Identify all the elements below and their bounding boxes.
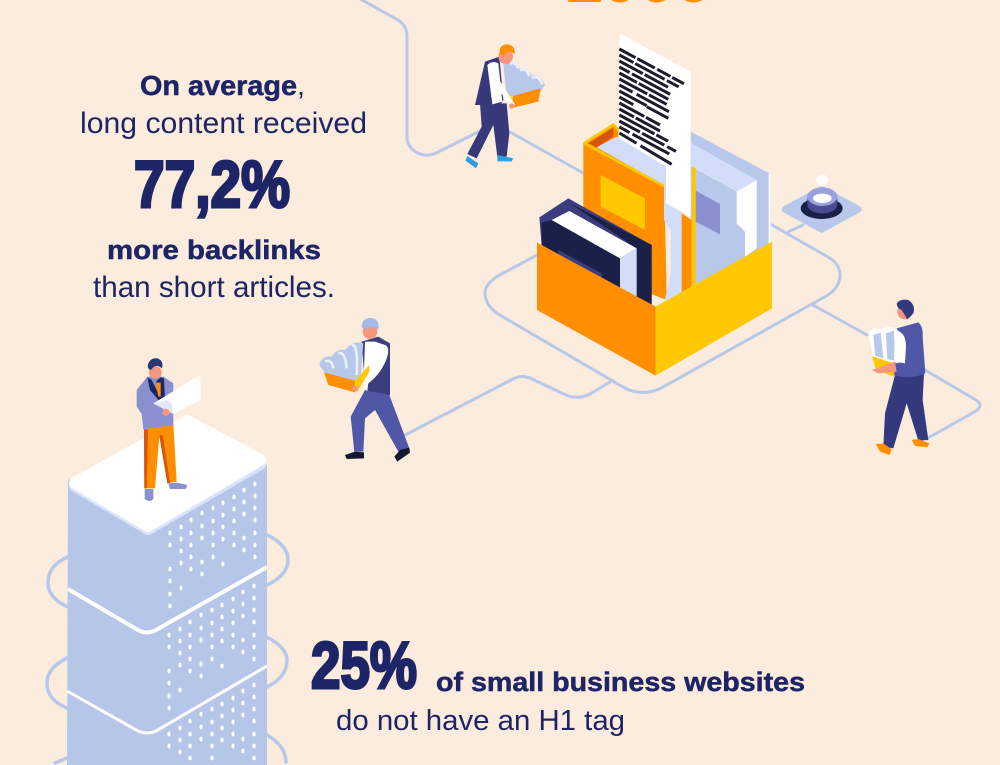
server stack <box>47 421 288 765</box>
vest and shirt <box>362 337 390 397</box>
man <box>465 44 515 168</box>
text: do not have an H1 tag: do not have an H1 tag <box>336 705 625 737</box>
connector lines network <box>362 0 980 438</box>
figure: person carrying box, top <box>465 44 545 168</box>
head <box>363 324 377 339</box>
carried papers <box>319 342 363 385</box>
text: On average: On average, <box>140 70 305 101</box>
text: long content received: long content received <box>80 107 367 140</box>
tablet <box>153 375 201 414</box>
top slab <box>75 421 260 529</box>
orange box <box>324 372 355 392</box>
figure: person with papers, right <box>868 300 929 455</box>
head <box>897 304 913 319</box>
big number: 77,2%: 77,2% <box>134 147 290 221</box>
shoes <box>145 483 187 501</box>
trousers <box>144 423 177 488</box>
white paper sheet with text lines <box>619 33 691 217</box>
figure: man reading on top of stack <box>137 358 201 501</box>
side cable loops <box>47 535 288 763</box>
bell button on pad <box>785 174 858 229</box>
layer seams <box>68 567 267 632</box>
orange folder <box>583 124 696 303</box>
text block: average backlinks statistic <box>80 70 367 304</box>
shoes <box>345 448 410 462</box>
dark book <box>539 198 652 305</box>
vest <box>893 322 925 377</box>
text block: H1 tag statistic <box>311 628 805 737</box>
blue body <box>67 430 267 765</box>
trousers <box>351 390 409 452</box>
jacket <box>137 377 173 429</box>
text: more backlinks: more backlinks <box>107 235 321 265</box>
trousers <box>883 373 928 448</box>
yellow box <box>872 356 895 377</box>
text: of small business websites: of small business websites <box>436 667 805 697</box>
back blue folder <box>691 132 771 287</box>
text: than short articles: than short articles. <box>93 271 335 304</box>
arm hand <box>872 362 897 373</box>
arm hand <box>352 385 358 391</box>
shoes <box>876 439 929 455</box>
figure: person with box, centre left <box>319 318 410 462</box>
illustration: document box <box>537 33 858 376</box>
rolled papers <box>868 327 898 363</box>
big number: 25%: 25% <box>311 628 417 702</box>
box front faces <box>537 242 772 376</box>
dot patterns <box>167 482 257 760</box>
head <box>149 366 162 379</box>
carried papers and box <box>498 62 545 108</box>
